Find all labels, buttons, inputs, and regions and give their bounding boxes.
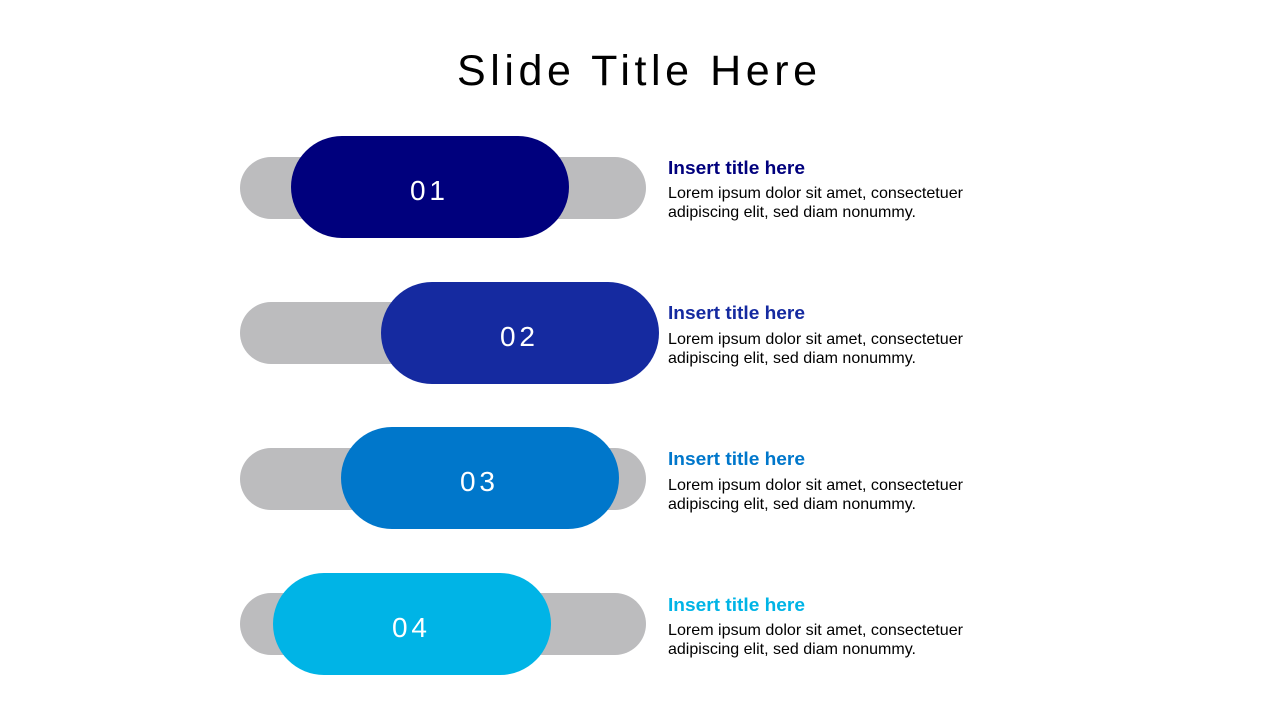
pill 01	[291, 136, 569, 238]
row 01	[240, 136, 964, 238]
body text 01: Lorem ipsum dolor sit amet, consectetuer	[668, 185, 964, 202]
body text 02: Lorem ipsum dolor sit amet, consectetuer	[668, 331, 964, 348]
heading 01: Insert title here	[668, 158, 805, 178]
grey track 04	[240, 593, 646, 655]
body text 04: Lorem ipsum dolor sit amet, consectetuer	[668, 622, 964, 639]
title: Slide Title Here	[457, 47, 817, 95]
heading 02: Insert title here	[668, 303, 805, 323]
body text 04: adipiscing elit, sed diam nonummy.	[668, 641, 916, 658]
number 03: 03	[460, 466, 495, 497]
pill 03	[341, 427, 619, 529]
grey track 03	[240, 448, 646, 510]
number 04: 04	[392, 612, 427, 643]
body text 03: Lorem ipsum dolor sit amet, consectetuer	[668, 477, 964, 494]
body text 01	[668, 185, 964, 221]
heading 04: Insert title here	[668, 595, 805, 615]
pill 02	[381, 282, 659, 384]
number 01: 01	[410, 175, 445, 206]
row 02	[240, 282, 964, 384]
heading 03: Insert title here	[668, 449, 805, 469]
grey track 02	[240, 302, 646, 364]
row 03	[240, 427, 964, 529]
pill 04	[273, 573, 551, 675]
body text 01: adipiscing elit, sed diam nonummy.	[668, 204, 916, 221]
body text 02	[668, 331, 964, 367]
body text 03	[668, 477, 964, 513]
body text 02: adipiscing elit, sed diam nonummy.	[668, 350, 916, 367]
number 02: 02	[500, 321, 535, 352]
row 04	[240, 573, 964, 675]
body text 03: adipiscing elit, sed diam nonummy.	[668, 496, 916, 513]
body text 04	[668, 622, 964, 658]
grey track 01	[240, 157, 646, 219]
